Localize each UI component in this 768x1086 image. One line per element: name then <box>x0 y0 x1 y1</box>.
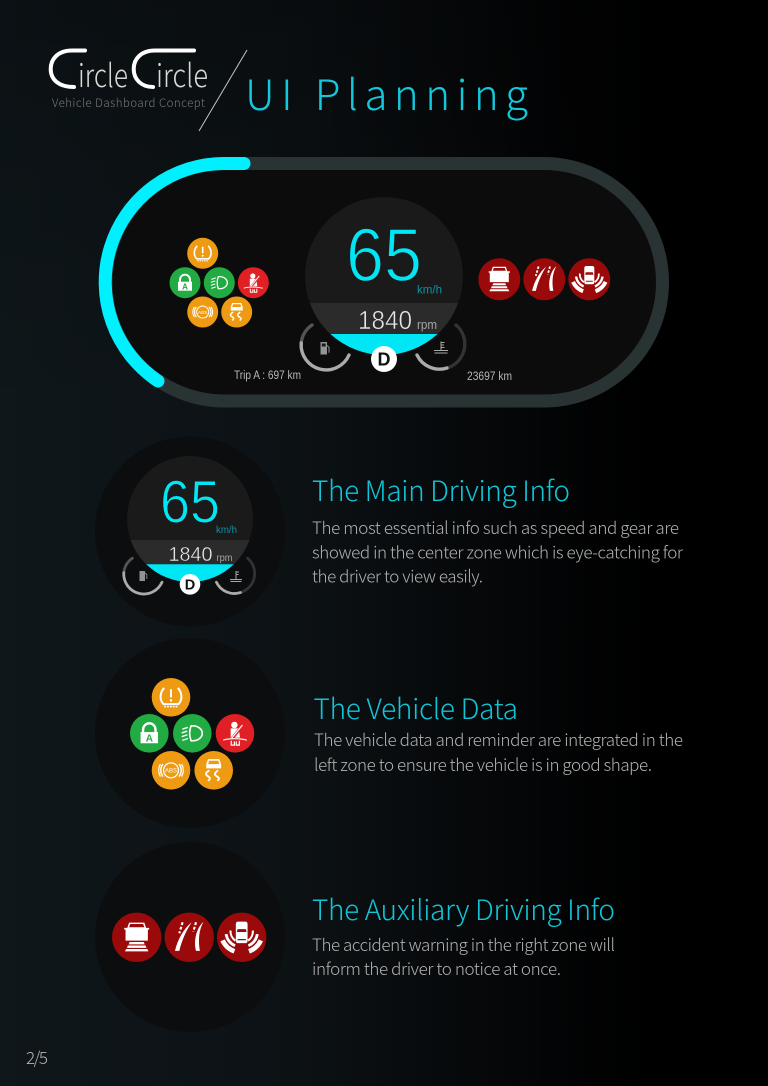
icon: auto lock: A <box>146 734 153 745</box>
icon: parking sensors <box>568 258 610 300</box>
icon: ABS <box>152 751 190 790</box>
logo: Circle Circle: ircle <box>156 51 208 97</box>
panel: main driving info circle: km/h <box>216 525 237 536</box>
center speedometer: rpm <box>417 318 437 332</box>
gear indicator small: D <box>185 578 195 594</box>
vehicle icons left <box>170 238 269 328</box>
text: main driving info <box>312 514 684 588</box>
text: vehicle data <box>314 726 683 776</box>
icon: forward collision <box>478 258 520 300</box>
page number: 2/5 <box>26 1044 48 1069</box>
center speedometer: 1840 <box>358 305 412 335</box>
temperature gauge small <box>216 558 255 594</box>
icon: lane departure <box>523 258 565 300</box>
center speedometer: km/h <box>417 282 442 296</box>
icon: ABS: ABS <box>198 310 208 316</box>
odometer: 23697 km <box>467 371 512 383</box>
panel: vehicle data circle <box>95 638 285 828</box>
text: main driving info: The most essential info such as speed and gear are <box>312 514 679 539</box>
dashboard track <box>106 164 662 401</box>
rpm value: 1840 <box>168 543 212 566</box>
panel: main driving info circle: rpm <box>216 553 232 564</box>
fuel gauge small <box>124 558 162 594</box>
icon: ABS: ABS <box>165 769 177 775</box>
text: vehicle data: The vehicle data and reminder are integrated in the <box>314 726 683 751</box>
icon: tire pressure <box>187 238 218 269</box>
icon: headlight <box>204 267 235 298</box>
text: auxiliary driving info: The accident warning in the right zone will <box>312 931 615 956</box>
icon: parking sensors <box>217 913 266 962</box>
icon: headlight <box>173 714 212 753</box>
heading: vehicle data: The Vehicle Data <box>314 688 518 728</box>
center speedometer: 65 <box>346 213 422 297</box>
icon: seatbelt <box>238 267 269 298</box>
text: auxiliary driving info <box>312 931 615 980</box>
trip text: Trip A : 697 km <box>234 370 301 382</box>
icon: skid control <box>194 751 233 790</box>
warning icons right <box>478 258 610 300</box>
panel: main driving info circle <box>95 436 285 626</box>
center speedometer <box>305 197 463 355</box>
gear indicator: D <box>378 350 390 370</box>
cyan speed arc <box>105 163 244 381</box>
text: auxiliary driving info: inform the driver to notice at once. <box>312 955 561 980</box>
title: UI Planning <box>245 62 528 123</box>
icon: forward collision <box>112 913 161 962</box>
fuel gauge <box>301 325 349 370</box>
text: vehicle data: left zone to ensure the vehicle is in good shape. <box>314 751 652 776</box>
text: main driving info: the driver to view easily. <box>312 562 483 588</box>
text: main driving info: showed in the center zone which is eye-catching for <box>312 538 684 564</box>
icon: auto lock: A <box>182 282 188 291</box>
gear indicator <box>371 346 397 372</box>
logo: Circle Circle: ircle <box>78 51 128 97</box>
gear indicator small <box>180 574 200 595</box>
speed value: 65 <box>160 468 220 536</box>
heading: main driving info: The Main Driving Info <box>312 470 570 510</box>
icon: seatbelt <box>216 714 254 753</box>
panel: auxiliary driving circle <box>95 842 285 1032</box>
panel: dashboard <box>105 163 662 401</box>
title divider slash <box>199 50 247 131</box>
heading: auxiliary driving info: The Auxiliary Driving Info <box>312 889 615 929</box>
icon: auto lock <box>130 714 169 753</box>
logo: Circle Circle <box>51 50 208 111</box>
temperature gauge <box>417 325 465 369</box>
icon: lane departure <box>165 913 214 962</box>
logo: Circle Circle: Vehicle Dashboard Concept <box>52 95 205 111</box>
icon: skid control <box>221 296 252 328</box>
icon: tire pressure <box>152 678 190 717</box>
